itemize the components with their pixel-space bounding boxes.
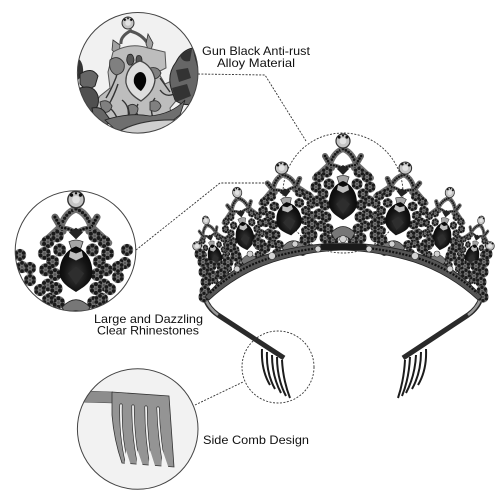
- crown right half: [364, 158, 498, 303]
- crown centre spire: [310, 134, 376, 246]
- label: gun black alloy: [202, 44, 311, 70]
- label: rhinestones: Clear Rhinestones: [97, 324, 199, 338]
- headband: left arm and comb: [205, 298, 290, 398]
- detail circle: gun black alloy: [77, 13, 199, 136]
- label: side comb: Side Comb Design: [203, 433, 309, 447]
- label: gun black alloy: Gun Black Anti-rust: [202, 44, 311, 58]
- comb plate and teeth: [112, 392, 174, 472]
- tiara: [189, 134, 498, 403]
- leader line: rhinestones: [136, 183, 275, 250]
- detail circle: side comb: [77, 369, 198, 489]
- label: gun black alloy: Alloy Material: [217, 56, 295, 70]
- dashed circle: crown top highlight: [283, 133, 403, 253]
- leader line: alloy material: [198, 74, 306, 141]
- crown left half: [189, 158, 323, 303]
- comb band: [80, 391, 113, 403]
- label: rhinestones: Large and Dazzling: [94, 312, 203, 326]
- dashed circle: comb highlight: [242, 331, 314, 403]
- headband: right arm and comb: [398, 298, 481, 398]
- leader line: side comb: [195, 382, 243, 405]
- crown base band: [205, 236, 482, 300]
- label: rhinestones: [94, 312, 203, 338]
- detail circle: rhinestones: [14, 191, 136, 322]
